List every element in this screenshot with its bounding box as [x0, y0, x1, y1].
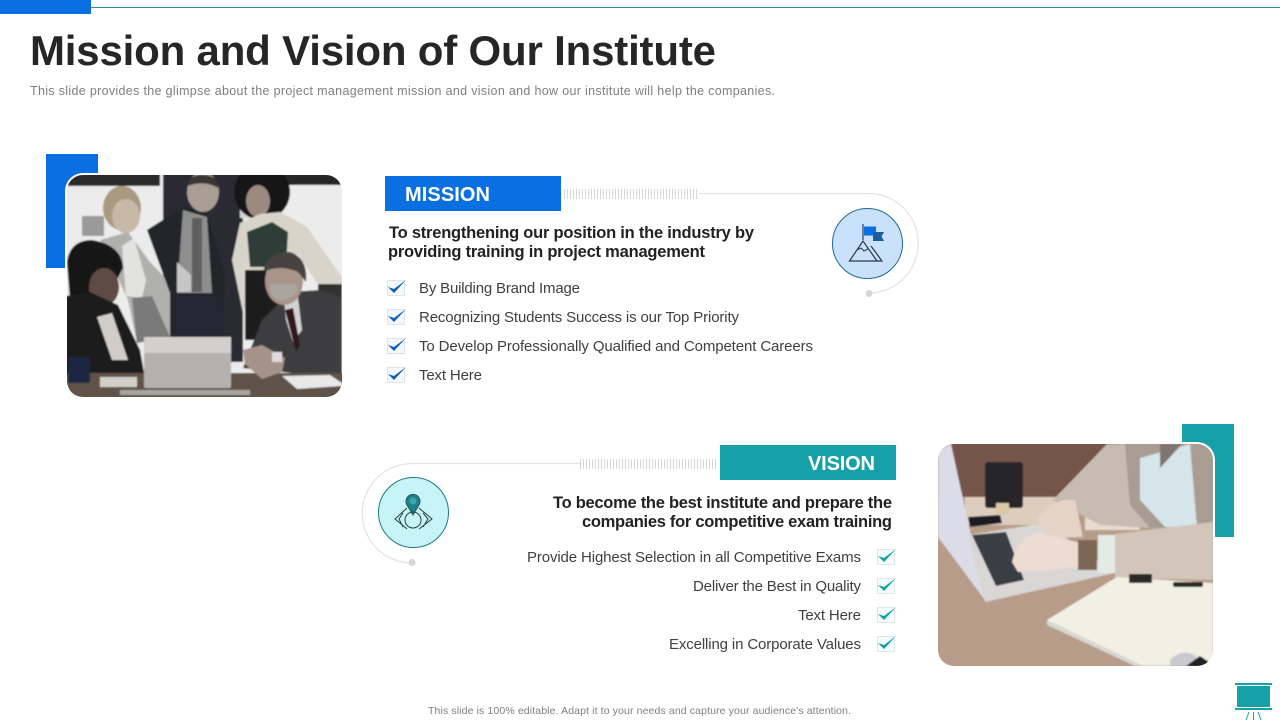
vision statement: To become the best institute and prepare the [553, 494, 892, 512]
icon: eye with location pin [378, 478, 448, 548]
vision connector with dot [362, 464, 717, 566]
accent block: vision photo [1182, 424, 1234, 537]
mission checklist [388, 280, 813, 384]
check item 1: By Building Brand Image [419, 280, 580, 297]
photo: team around a laptop [65, 173, 342, 397]
icon: mountain with flag [832, 208, 902, 278]
check item 3: Text Here [798, 607, 861, 624]
standing woman [234, 175, 291, 219]
check item 4: Text Here [419, 367, 482, 384]
check item 4 [388, 367, 482, 384]
icon: presentation board [1235, 683, 1272, 720]
footer note: This slide is 100% editable. Adapt it to your needs and capture your audience's attention. [428, 705, 851, 717]
check item 2: Recognizing Students Success is our Top Priority [419, 309, 740, 326]
vision statement [553, 494, 892, 531]
check item 3: To Develop Professionally Qualified and Competent Careers [419, 338, 813, 355]
photo: hands typing on a laptop [930, 440, 1220, 670]
table and objects [67, 372, 342, 397]
title: Mission and Vision of Our Institute [30, 27, 716, 74]
mission header banner: MISSION [405, 184, 490, 206]
vision checklist [527, 549, 896, 653]
mission statement: providing training in project management [388, 243, 706, 261]
seated woman [67, 240, 123, 300]
vision statement: companies for competitive exam training [582, 513, 892, 531]
mission connector with dot [564, 194, 918, 297]
mission statement: To strengthening our position in the industry by [389, 224, 755, 242]
standing man [146, 210, 214, 294]
mission header banner [385, 176, 561, 211]
seated man [243, 290, 342, 378]
check item 1: Provide Highest Selection in all Competitive Exams [527, 549, 861, 566]
top accent bar [0, 0, 1280, 14]
blonde woman [100, 232, 170, 343]
vision header banner [720, 445, 896, 480]
check item 2: Deliver the Best in Quality [693, 578, 862, 595]
vision header banner: VISION [808, 453, 875, 475]
mission statement [388, 224, 755, 261]
check item 3 [798, 607, 896, 624]
check item 4: Excelling in Corporate Values [669, 636, 861, 653]
accent block: mission photo [46, 154, 98, 268]
subtitle: This slide provides the glimpse about the project management mission and vision and how our institute will help the companies. [30, 84, 775, 98]
